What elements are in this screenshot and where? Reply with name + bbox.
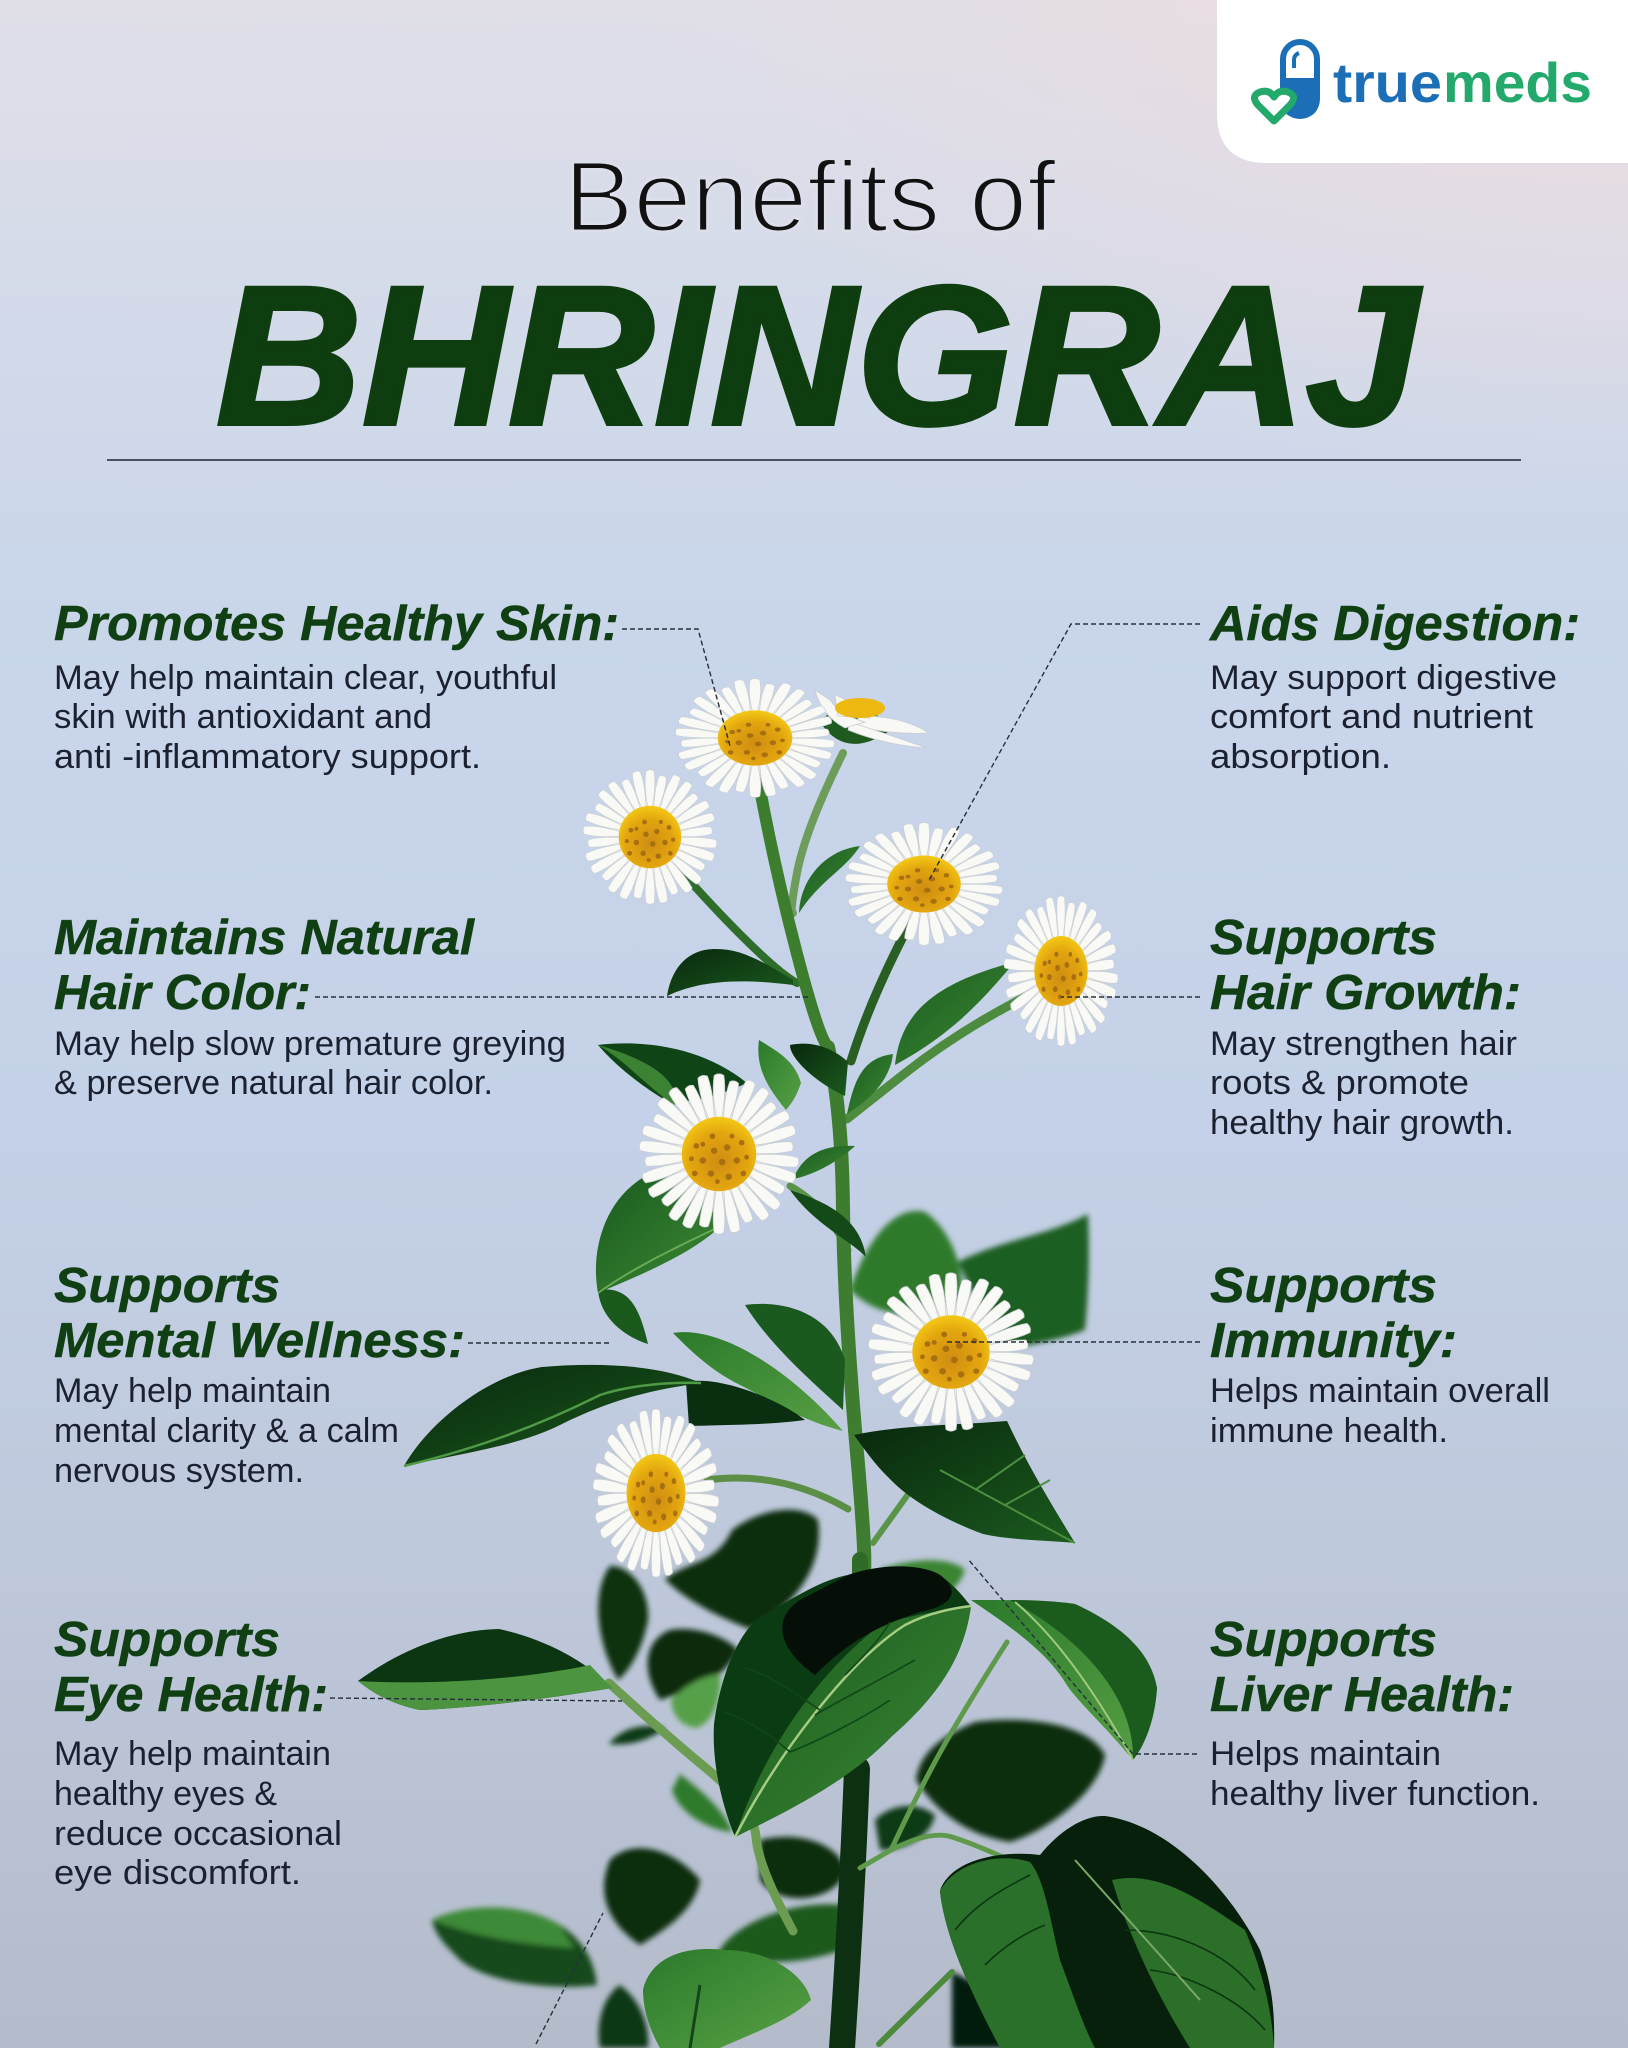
heading: [54, 1613, 328, 1722]
heading: [1210, 911, 1521, 1020]
flower: far right: [998, 889, 1124, 1053]
blurred background leaves: [432, 1211, 1105, 2048]
panel: supports mental wellness: [54, 1259, 465, 1490]
description: May help slow premature greying: [54, 1025, 566, 1063]
lower front leaves: [358, 1566, 1274, 2048]
heading: Supports: [1210, 911, 1437, 965]
description: eye discomfort.: [54, 1854, 301, 1892]
description: reduce occasional: [54, 1815, 342, 1853]
title line: BHRINGRAJ: BHRINGRAJ: [216, 245, 1422, 466]
heading: Maintains Natural: [54, 911, 475, 965]
flower: top centre: [667, 673, 843, 803]
description: May support digestive: [1210, 659, 1557, 697]
stems: [609, 753, 1027, 2048]
flower: lower left: [586, 1402, 726, 1584]
panel: supports liver health: [1210, 1613, 1540, 1813]
heading: Supports: [54, 1259, 280, 1313]
panel: supports hair growth: [1210, 911, 1521, 1142]
description: May help maintain clear, youthful: [54, 659, 557, 697]
panel: supports eye health: [54, 1613, 342, 1892]
description: May help maintain: [54, 1735, 331, 1773]
flowers: [576, 673, 1124, 1584]
description: [54, 659, 557, 776]
upper leaves: [596, 846, 1015, 1344]
description: healthy liver function.: [1210, 1775, 1540, 1813]
icon: capsule: [1281, 42, 1319, 118]
description: absorption.: [1210, 738, 1391, 776]
description: [1210, 1372, 1550, 1450]
logo word: true: true: [1333, 51, 1442, 114]
icon: heart outline: [1254, 91, 1294, 121]
heading: [1210, 1613, 1514, 1722]
description: nervous system.: [54, 1452, 304, 1490]
heading: Liver Health:: [1210, 1668, 1514, 1722]
title line: Benefits of: Benefits of: [564, 141, 1056, 253]
flower: top left: [576, 764, 724, 910]
description: anti -inflammatory support.: [54, 738, 481, 776]
middle leaves: [404, 1304, 1075, 1543]
panel: aids digestion: [1209, 597, 1580, 776]
heading: Promotes Healthy Skin:: [54, 597, 619, 651]
description: immune health.: [1210, 1412, 1448, 1450]
description: [1210, 1025, 1517, 1142]
heading: Eye Health:: [54, 1668, 328, 1722]
description: & preserve natural hair color.: [54, 1064, 493, 1102]
description: [54, 1735, 342, 1892]
panel: maintains natural hair color: [54, 911, 566, 1102]
description: [54, 1025, 566, 1102]
description: healthy eyes &: [54, 1775, 277, 1813]
description: skin with antioxidant and: [54, 698, 432, 736]
logo: truemeds: [1217, 0, 1628, 163]
description: [1210, 659, 1557, 776]
description: healthy hair growth.: [1210, 1104, 1514, 1142]
description: roots & promote: [1210, 1064, 1469, 1102]
heading: Hair Color:: [54, 966, 311, 1020]
heading: Supports: [54, 1613, 280, 1667]
description: mental clarity & a calm: [54, 1412, 399, 1450]
description: [1210, 1735, 1540, 1813]
flower: side bud: [815, 690, 929, 748]
heading: Supports: [1210, 1259, 1437, 1313]
leaf: bottom right: [940, 1816, 1274, 2048]
leader lines: [315, 624, 1200, 2044]
description: [54, 1372, 399, 1490]
panel: supports immunity: [1210, 1259, 1550, 1450]
flower: centre right: [837, 817, 1011, 951]
heading: [54, 911, 475, 1020]
description: Helps maintain: [1210, 1735, 1441, 1773]
logo word: meds: meds: [1443, 51, 1592, 114]
flower: middle right: [860, 1266, 1042, 1438]
flower: middle left: [631, 1067, 807, 1241]
description: May help maintain: [54, 1372, 331, 1410]
description: Helps maintain overall: [1210, 1372, 1550, 1410]
description: comfort and nutrient: [1210, 698, 1534, 736]
heading: Aids Digestion:: [1209, 597, 1580, 651]
heading: [1210, 1259, 1457, 1368]
heading: Mental Wellness:: [54, 1314, 465, 1368]
heading: Hair Growth:: [1210, 966, 1521, 1020]
heading: Immunity:: [1210, 1314, 1457, 1368]
plant illustration: [358, 673, 1274, 2048]
heading: Supports: [1210, 1613, 1437, 1667]
heading: [54, 1259, 465, 1368]
title: [216, 141, 1422, 466]
description: May strengthen hair: [1210, 1025, 1517, 1063]
panel: promotes healthy skin: [54, 597, 619, 776]
